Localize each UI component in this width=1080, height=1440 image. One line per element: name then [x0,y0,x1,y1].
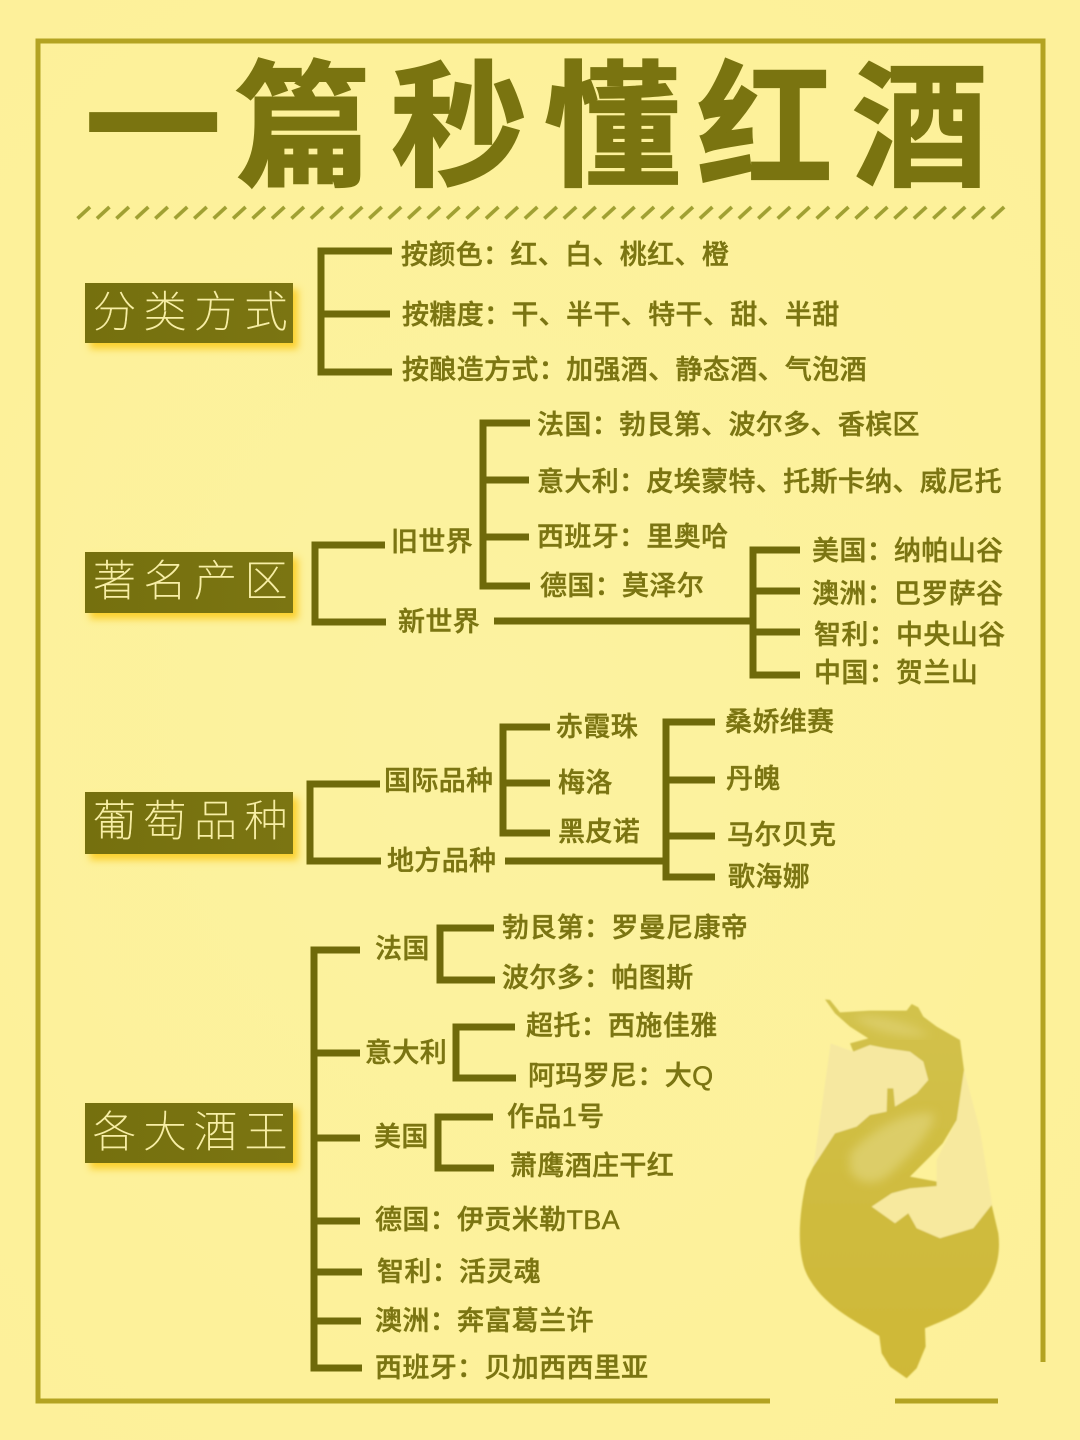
text: top wines: 阿玛罗尼：大Q [528,1061,713,1091]
branch group 4: top wines [314,928,516,1368]
title [85,52,988,204]
text: grape varieties [384,707,836,892]
text: top wines: 萧鹰酒庄干红 [510,1151,674,1181]
text: top wines: 美国 [374,1122,429,1152]
title: 酒 [852,52,988,204]
text: grape varieties: 桑娇维赛 [725,707,834,737]
branch group 2: regions [315,423,800,675]
illustration: wine glass splash [800,999,999,1378]
text: regions [391,410,1005,688]
text: grape varieties: 地方品种 [387,846,496,876]
text: grape varieties: 丹魄 [726,764,781,794]
text: regions: 中国：贺兰山 [814,658,978,688]
text: regions: 法国：勃艮第、波尔多、香槟区 [537,410,920,440]
title: 秒 [391,52,527,204]
text: grape varieties: 赤霞珠 [556,712,638,742]
text: grape varieties: 歌海娜 [728,862,810,892]
text: classification items: 按酿造方式：加强酒、静态酒、气泡酒 [402,355,867,385]
title: 红 [697,52,833,204]
title: 一 [85,52,221,204]
text: regions: 西班牙：里奥哈 [537,522,728,552]
title: 懂 [544,52,680,204]
text: regions: 旧世界 [391,527,473,557]
label: top wines: 各大酒王 [93,1098,295,1160]
text: top wines: 勃艮第：罗曼尼康帝 [502,913,748,943]
text: top wines: 超托：西施佳雅 [526,1011,717,1041]
text: grape varieties: 梅洛 [558,768,613,798]
text: classification items: 按颜色：红、白、桃红、橙 [401,240,729,270]
text: classification items: 按糖度：干、半干、特干、甜、半甜 [402,300,840,330]
text: top wines: 澳洲：奔富葛兰许 [375,1306,594,1336]
text: regions: 新世界 [398,607,480,637]
text: top wines [365,913,748,1383]
text: grape varieties: 黑皮诺 [558,817,640,847]
hatched divider [75,205,1009,221]
text: top wines: 西班牙：贝加西西里亚 [375,1353,648,1383]
title: 篇 [235,52,371,204]
branch group 3: grape varieties [310,722,715,877]
text: top wines: 作品1号 [507,1102,604,1132]
text: top wines: 意大利 [365,1038,447,1068]
text: classification items [401,240,867,385]
text: regions: 意大利：皮埃蒙特、托斯卡纳、威尼托 [537,467,1002,497]
label: grape varieties: 葡萄品种 [93,787,295,849]
text: regions: 澳洲：巴罗萨谷 [812,579,1003,609]
text: top wines: 波尔多：帕图斯 [502,963,693,993]
text: top wines: 德国：伊贡米勒TBA [375,1205,620,1235]
text: regions: 智利：中央山谷 [814,620,1005,650]
text: top wines: 法国 [375,934,430,964]
label: classification: 分类方式 [93,278,295,340]
text: regions: 美国：纳帕山谷 [812,536,1003,566]
label: regions: 著名产区 [93,547,295,609]
text: grape varieties: 马尔贝克 [727,820,836,850]
text: regions: 德国：莫泽尔 [540,571,704,601]
branch group 1: classification [321,251,392,372]
text: top wines: 智利：活灵魂 [377,1257,541,1287]
text: grape varieties: 国际品种 [384,766,493,796]
